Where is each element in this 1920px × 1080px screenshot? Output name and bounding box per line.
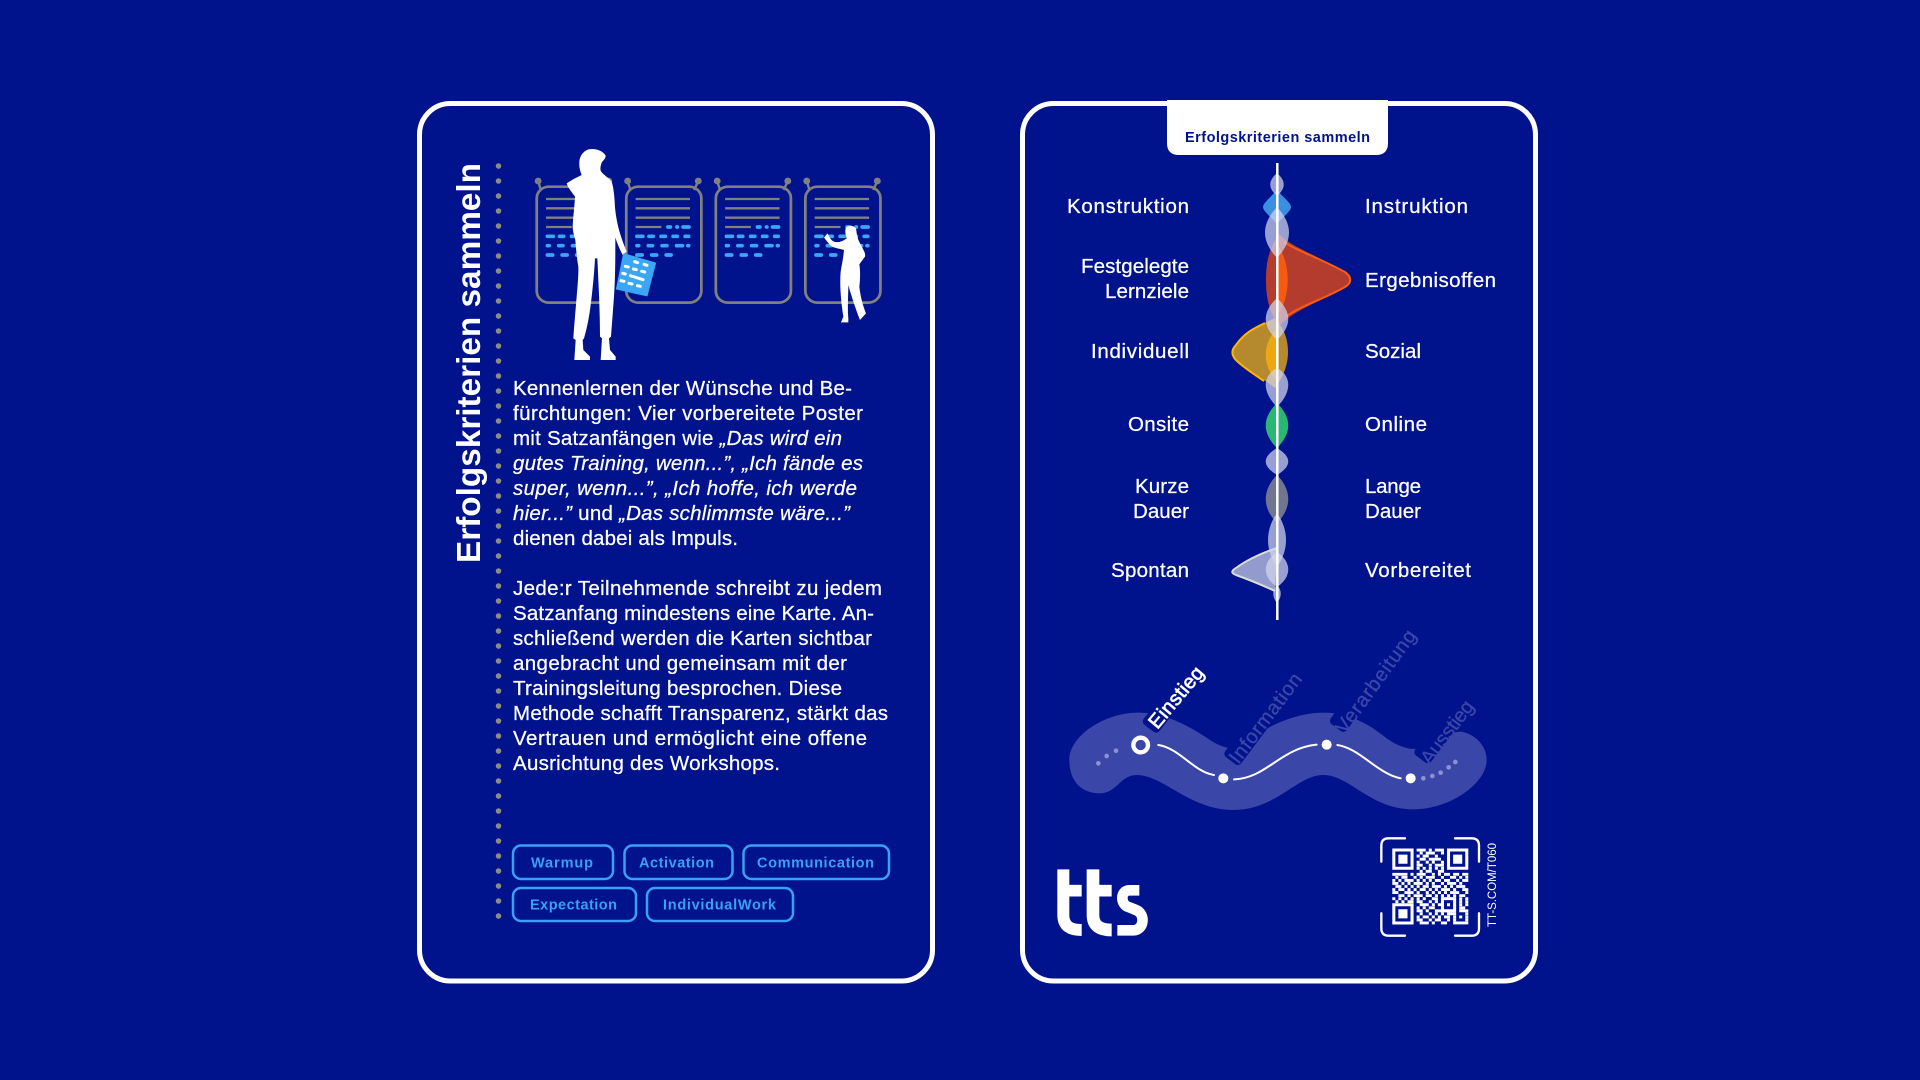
QR link text: TT-S.COM/T060	[1487, 843, 1499, 927]
body text: Jede:r Teilnehmende schreibt zu jedem	[513, 577, 882, 600]
left axis labels: Festgelegte	[1081, 255, 1189, 278]
body text: Ausrichtung des Workshops.	[513, 752, 780, 775]
logo: tts	[1063, 869, 1143, 930]
tag pills	[513, 846, 889, 921]
right axis labels: Dauer	[1365, 500, 1421, 523]
right axis labels	[1365, 195, 1496, 582]
left axis labels: Lernziele	[1105, 280, 1189, 303]
icon: standing woman with clipboard	[567, 149, 655, 360]
body text: fürchtungen: Vier vorbereitete Poster	[513, 402, 863, 425]
tag pills: Warmup	[531, 856, 593, 872]
right axis labels: Instruktion	[1365, 195, 1468, 218]
right axis labels: Sozial	[1365, 340, 1421, 363]
panel: right profile card	[1022, 100, 1536, 981]
right axis labels: Vorbereitet	[1365, 559, 1471, 582]
left axis labels: Dauer	[1133, 500, 1189, 523]
left axis labels: Konstruktion	[1067, 195, 1189, 218]
left axis labels	[1067, 195, 1189, 582]
body text: gutes Training, wenn...”, „Ich fände es	[513, 452, 863, 475]
left axis labels: Onsite	[1128, 413, 1189, 436]
tag pills: Expectation	[530, 898, 617, 914]
body text: Satzanfang mindestens eine Karte. An-	[513, 602, 874, 625]
body text	[513, 377, 888, 775]
vertical heading: Erfolgskriterien sammeln	[450, 163, 487, 563]
stage label: Verarbeitung: Verarbeitung	[1331, 626, 1421, 738]
stage label: Ausstieg: Ausstieg	[1416, 696, 1479, 769]
QR code with frame	[1381, 838, 1499, 936]
body text: mit Satzanfängen wie „Das wird ein	[513, 427, 842, 450]
right axis labels: Lange	[1365, 475, 1421, 498]
tag pills: Communication	[757, 856, 874, 872]
body text: angebracht und gemeinsam mit der	[513, 652, 847, 675]
body text: hier...” und „Das schlimmste wäre...”	[513, 502, 851, 525]
body text: schließend werden die Karten sichtbar	[513, 627, 872, 650]
left axis labels: Kurze	[1135, 475, 1189, 498]
stage label: Information: Information	[1225, 669, 1307, 768]
body text: Kennenlernen der Wünsche und Be-	[513, 377, 852, 400]
violin profile chart	[1232, 163, 1350, 620]
panel: left method card	[420, 104, 932, 981]
stage tabs	[1141, 662, 1469, 767]
journey path and stage markers	[1096, 738, 1458, 783]
body text: Methode schafft Transparenz, stärkt das	[513, 702, 888, 725]
body text: Vertrauen und ermöglicht eine offene	[513, 727, 867, 750]
right axis labels: Online	[1365, 413, 1427, 436]
heading tab	[1167, 100, 1388, 155]
icon: small figure at poster	[824, 226, 866, 322]
heading tab: Erfolgskriterien sammeln	[1185, 130, 1370, 146]
dotted vertical divider	[496, 166, 501, 917]
tag pills: Activation	[639, 856, 714, 872]
body text: Trainingsleitung besprochen. Diese	[513, 677, 842, 700]
left axis labels: Spontan	[1111, 559, 1189, 582]
tag pills: IndividualWork	[663, 898, 777, 914]
stage label: Einstieg: Einstieg	[1144, 662, 1209, 733]
body text: super, wenn...”, „Ich hoffe, ich werde	[513, 477, 857, 500]
learning journey wave	[1069, 626, 1487, 810]
illustration: posters and people	[535, 149, 881, 360]
body text: dienen dabei als Impuls.	[513, 527, 738, 550]
left axis labels: Individuell	[1091, 340, 1189, 363]
right axis labels: Ergebnisoffen	[1365, 269, 1496, 292]
